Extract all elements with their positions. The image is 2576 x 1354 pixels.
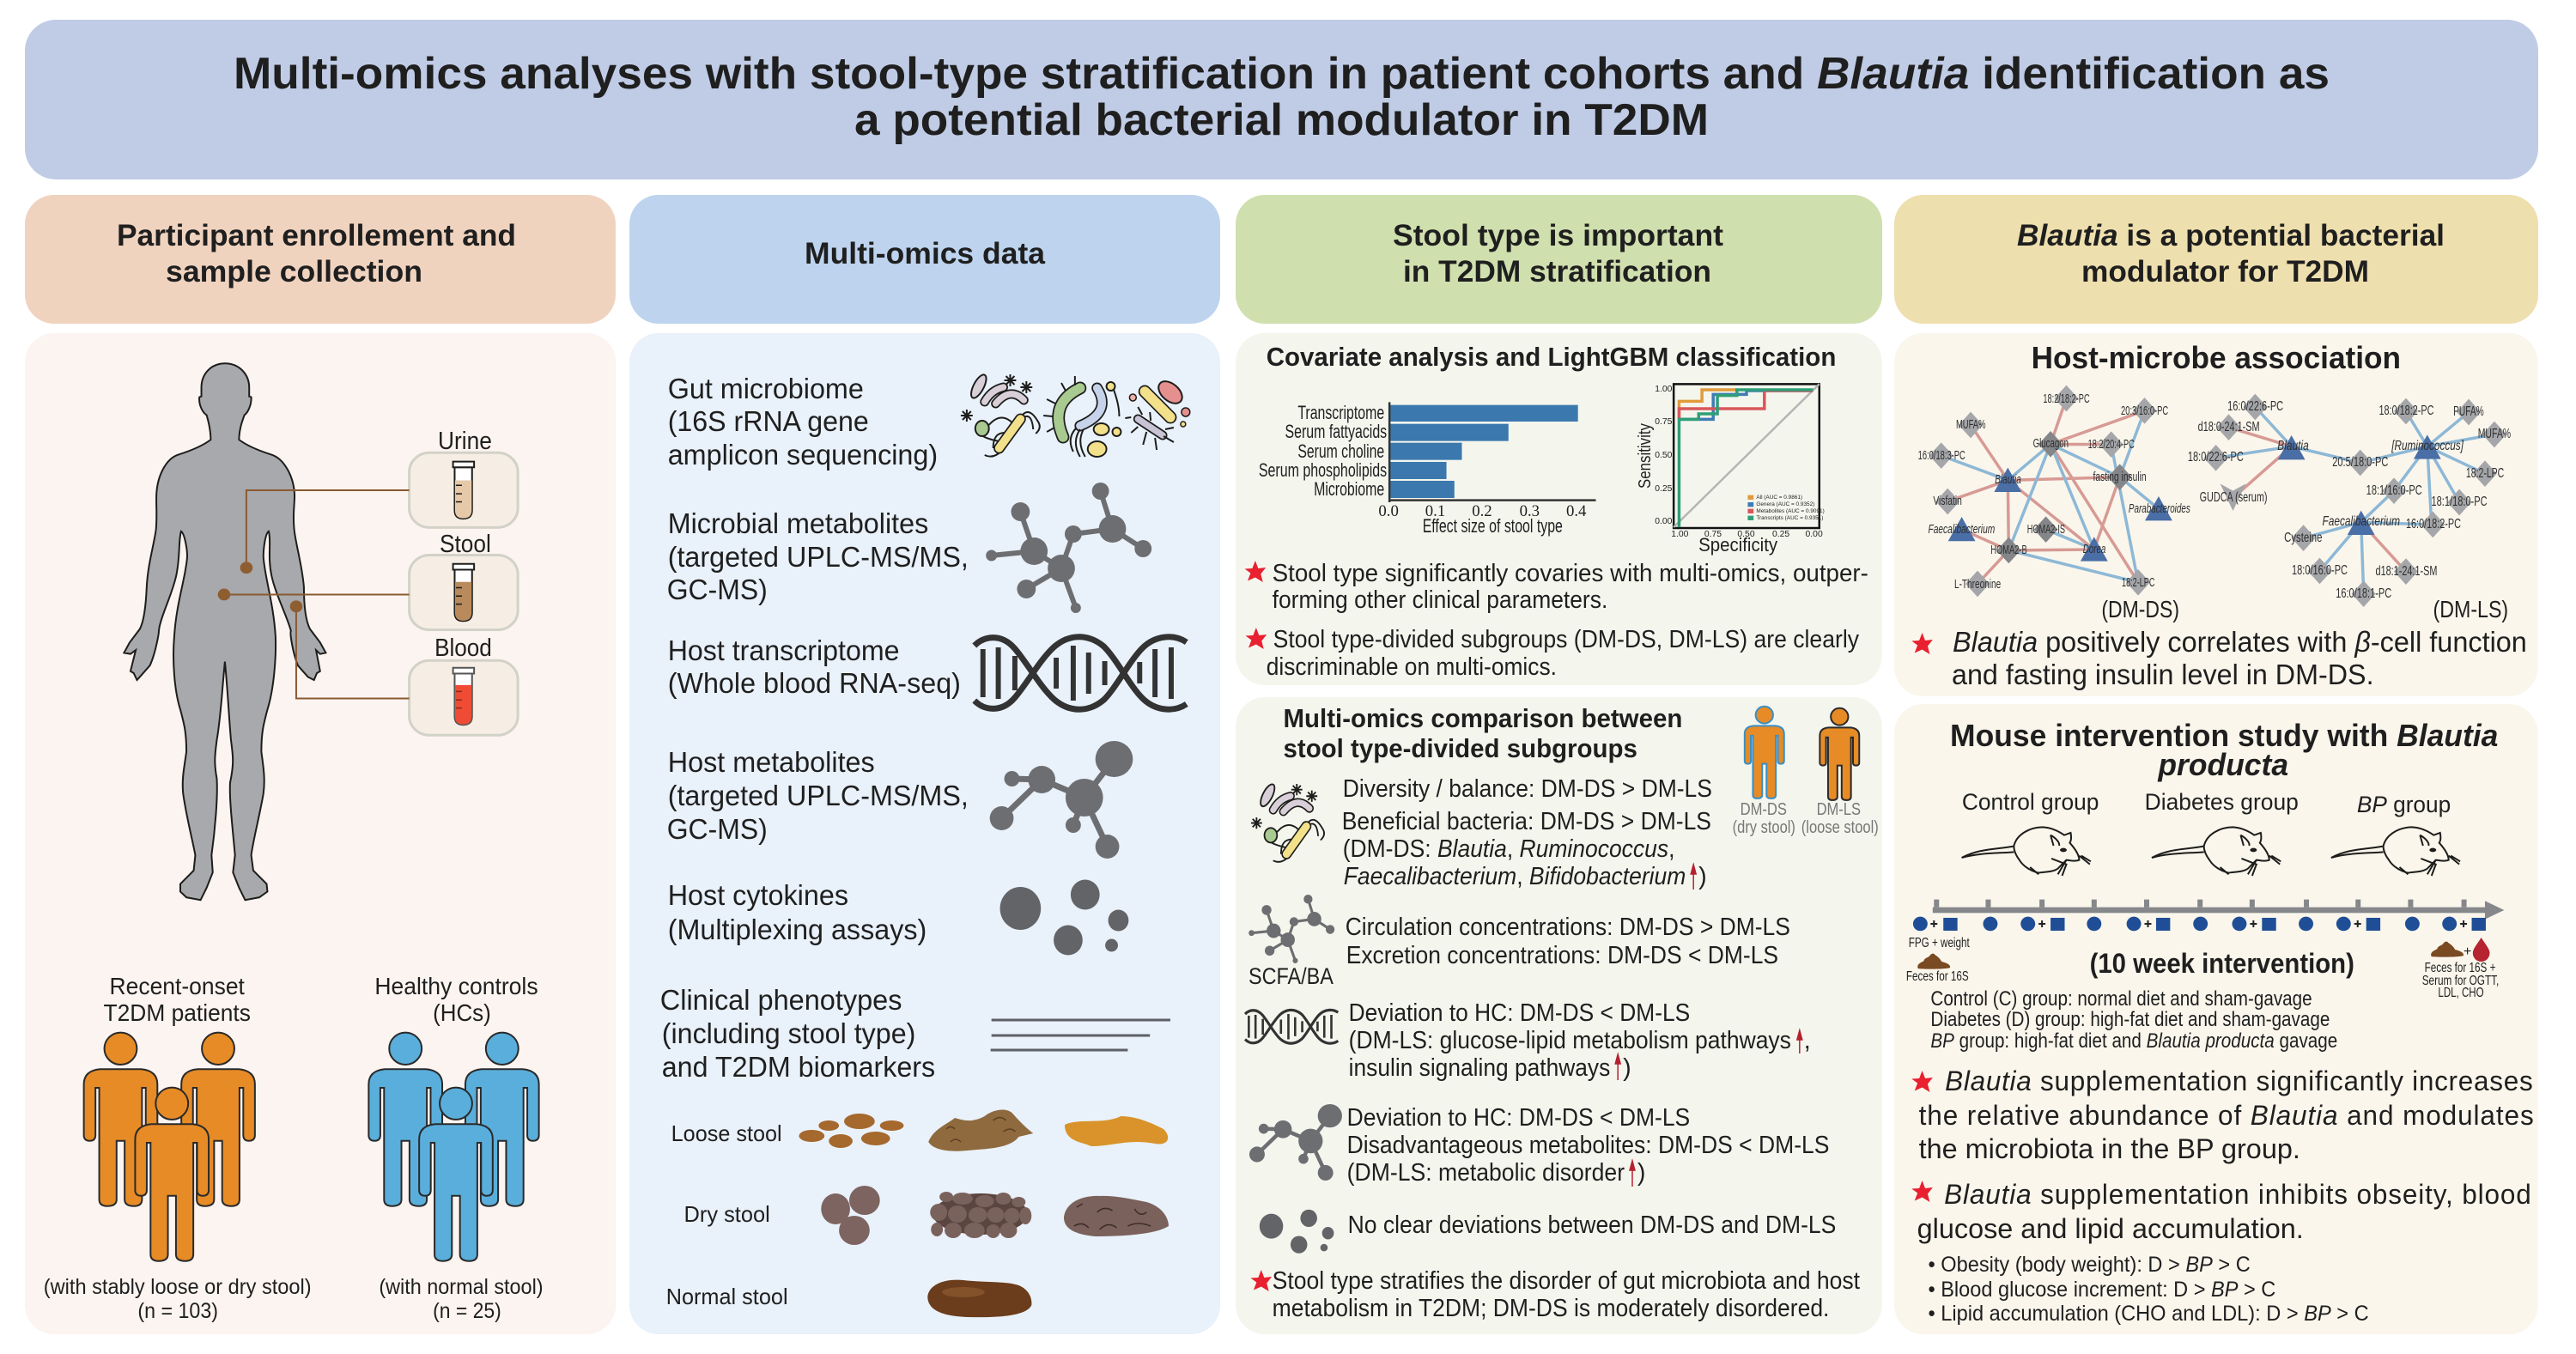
heading: Host-microbe association bbox=[2032, 341, 2401, 375]
network: DM-LS: MUFA% bbox=[2478, 427, 2511, 441]
header: participant enrollment: sample collection bbox=[166, 255, 422, 288]
microbiome comparison text: Beneficial bacteria: DM-DS > DM-LS bbox=[1342, 808, 1711, 835]
bar chart: effect size of stool type: 0.2 bbox=[1472, 502, 1492, 520]
header: participant enrollment bbox=[25, 195, 616, 324]
network: DM-DS: 18:2/20:4-PC bbox=[2088, 438, 2135, 452]
transcriptome comparison text: , bbox=[1804, 1027, 1811, 1054]
bar chart: effect size of stool type: Serum fattyacids bbox=[1285, 421, 1387, 442]
sample labels: Blood bbox=[434, 634, 492, 662]
group descriptions: Control (C) group: normal diet and sham-gavage bbox=[1930, 987, 2312, 1011]
text: gut microbiome: Gut microbiome bbox=[668, 373, 864, 404]
chart: ROC curves: 0.50 bbox=[1737, 530, 1755, 539]
network: DM-LS: 18:0/18:2-PC bbox=[2379, 404, 2433, 418]
text: host metabolites: Host metabolites bbox=[668, 746, 875, 778]
finding 2 bbox=[1911, 1179, 2531, 1244]
metabolite comparison text: ) bbox=[1637, 1159, 1645, 1187]
group label: healthy controls bbox=[374, 973, 538, 1026]
sample tubes and connectors bbox=[218, 452, 518, 735]
finding 2: glucose and lipid accumulation. bbox=[1917, 1213, 2304, 1244]
network: DM-LS: 18:0/22:6-PC bbox=[2188, 450, 2244, 464]
sample labels: Urine bbox=[438, 428, 492, 455]
text: host transcriptome bbox=[668, 634, 961, 699]
panel: multi-omics comparison bbox=[1236, 697, 1882, 1334]
panel: mouse intervention study bbox=[1894, 704, 2538, 1334]
chart: ROC curves: 1.00 bbox=[1655, 385, 1673, 394]
network: DM-DS: Glucagon bbox=[2033, 437, 2069, 451]
icon: metabolite molecule small bbox=[1249, 1104, 1342, 1181]
network: DM-LS: 18:1/16:0-PC bbox=[2366, 483, 2422, 498]
chart: ROC curves: 0.75 bbox=[1704, 530, 1722, 539]
header: multi-omics data: Multi-omics data bbox=[805, 237, 1046, 270]
header: Blautia modulator: Blautia is a potential bacterial bbox=[2017, 219, 2445, 252]
text: host cytokines: Host cytokines bbox=[668, 879, 848, 911]
finding 1 bbox=[1911, 1066, 2534, 1164]
network: DM-LS: [Ruminococcus] bbox=[2391, 439, 2464, 453]
chart: ROC curves: 0.50 bbox=[1655, 451, 1673, 460]
subgroup labels: (loose stool) bbox=[1801, 818, 1879, 837]
bar chart: effect size of stool type: 0.0 bbox=[1378, 502, 1399, 520]
transcriptome comparison text bbox=[1349, 999, 1811, 1082]
microbiome comparison text: (DM-DS: Blautia, Ruminococcus, bbox=[1343, 835, 1674, 863]
subgroup labels: (dry stool) bbox=[1733, 818, 1795, 837]
network: DM-LS: 18:2-LPC bbox=[2466, 466, 2504, 481]
chart: ROC curves: 0.00 bbox=[1806, 530, 1823, 539]
text: microbial metabolites bbox=[667, 507, 969, 605]
group label: T2DM patients bbox=[104, 973, 251, 1026]
heading: Mouse intervention study with Blautia bbox=[1950, 719, 2498, 753]
heading bbox=[1284, 703, 1682, 763]
text: microbial metabolites: Microbial metabolites bbox=[668, 507, 928, 539]
network: DM-LS: PUFA% bbox=[2453, 404, 2484, 419]
text: host metabolites bbox=[667, 746, 969, 845]
group labels: BP group bbox=[2357, 792, 2451, 817]
header: stool type: Stool type is important bbox=[1393, 219, 1723, 252]
text: gut microbiome: (16S rRNA gene bbox=[668, 405, 869, 437]
transcriptome comparison text: ) bbox=[1623, 1054, 1631, 1082]
endpoint sampling: + bbox=[2464, 944, 2471, 959]
header: stool type: in T2DM stratification bbox=[1403, 255, 1711, 288]
chart: ROC curves: 0.25 bbox=[1655, 484, 1673, 494]
text: microbial metabolites: (targeted UPLC-MS/MS, bbox=[668, 541, 969, 573]
network: DM-DS: Dorea bbox=[2083, 543, 2105, 556]
bar chart: effect size of stool type: Transcriptome bbox=[1297, 402, 1384, 423]
text: microbial metabolites: GC-MS) bbox=[667, 574, 768, 605]
text: host metabolites: GC-MS) bbox=[667, 813, 768, 845]
finding 1: the relative abundance of Blautia and modulates bbox=[1919, 1100, 2534, 1131]
conclusion: metabolism in T2DM; DM-DS is moderately disordered. bbox=[1273, 1295, 1829, 1322]
text: host transcriptome: (Whole blood RNA-seq) bbox=[668, 667, 961, 699]
group descriptions: Diabetes (D) group: high-fat diet and sham-gavage bbox=[1930, 1008, 2330, 1031]
network: DM-DS: MUFA% bbox=[1956, 418, 1985, 432]
stool row labels: Dry stool bbox=[684, 1203, 770, 1227]
network: DM-LS bbox=[2188, 394, 2511, 622]
microbiome comparison text: Diversity / balance: DM-DS > DM-LS bbox=[1343, 775, 1712, 803]
header: participant enrollment: Participant enrollement and bbox=[117, 219, 516, 252]
stool row labels: Loose stool bbox=[671, 1122, 782, 1146]
title banner bbox=[25, 20, 2538, 179]
network: DM-LS: (DM-LS) bbox=[2433, 596, 2508, 622]
network: DM-LS: 16:0/22:6-PC bbox=[2227, 399, 2283, 414]
bullet list bbox=[1928, 1254, 2369, 1326]
group descriptions: BP group: high-fat diet and Blautia producta gavage bbox=[1930, 1029, 2337, 1053]
network: DM-DS: 18:2/18:2-PC bbox=[2043, 392, 2090, 406]
subgroup labels: DM-DS bbox=[1741, 800, 1787, 819]
network: DM-DS: fasting insulin bbox=[2093, 471, 2147, 484]
healthy cohort caption bbox=[379, 1275, 544, 1323]
metabolite comparison text: Deviation to HC: DM-DS < DM-LS bbox=[1347, 1104, 1690, 1132]
healthy cohort caption: (with normal stool) bbox=[379, 1275, 544, 1299]
title banner: a potential bacterial modulator in T2DM bbox=[854, 95, 1709, 145]
title banner: Multi-omics analyses with stool-type stratification in patient cohorts and Blautia identification as bbox=[234, 49, 2330, 99]
network: DM-DS: (DM-DS) bbox=[2101, 596, 2179, 622]
icon: DM-DS person bbox=[1745, 707, 1784, 798]
bullet list: • Lipid accumulation (CHO and LDL): D > BP > C bbox=[1928, 1302, 2369, 1326]
group labels: Diabetes group bbox=[2145, 789, 2299, 815]
chart: ROC curves bbox=[1635, 384, 1825, 556]
icon: normal stool bbox=[927, 1280, 1031, 1317]
network: DM-LS: 16:0/18:2-PC bbox=[2406, 517, 2461, 531]
text: clinical phenotypes: (including stool type) bbox=[662, 1017, 915, 1049]
network: DM-LS: d18:1-24:1-SM bbox=[2376, 564, 2437, 579]
group labels bbox=[1962, 789, 2451, 817]
bar chart: effect size of stool type: 0.4 bbox=[1566, 502, 1587, 520]
finding: and fasting insulin level in DM-DS. bbox=[1952, 659, 2374, 690]
chart: ROC curves: 0.00 bbox=[1655, 517, 1673, 526]
sample labels bbox=[434, 428, 492, 662]
icon: microbial molecule bbox=[986, 483, 1151, 613]
transcriptome comparison text: insulin signaling pathways bbox=[1349, 1054, 1610, 1082]
chart: ROC curves: 0.25 bbox=[1772, 530, 1789, 539]
T2DM cohort caption bbox=[44, 1275, 312, 1323]
panel: multi-omics data bbox=[629, 333, 1220, 1334]
header: Blautia modulator: modulator for T2DM bbox=[2081, 255, 2369, 288]
SCFA comparison text: Excretion concentrations: DM-DS < DM-LS bbox=[1346, 942, 1778, 969]
healthy cohort caption: (n = 25) bbox=[433, 1299, 501, 1323]
metabolite comparison text: (DM-LS: metabolic disorder bbox=[1347, 1159, 1625, 1187]
network: DM-LS: Blautia bbox=[2277, 439, 2309, 453]
text: host metabolites: (targeted UPLC-MS/MS, bbox=[668, 780, 969, 811]
icon: healthy control group bbox=[368, 1033, 539, 1261]
stool row labels bbox=[666, 1122, 788, 1309]
icon: DM-LS person bbox=[1820, 708, 1859, 800]
network: DM-DS: Blautia bbox=[1995, 473, 2021, 487]
finding 2: discriminable on multi-omics. bbox=[1267, 653, 1557, 681]
endpoint sampling: Feces for 16S + bbox=[2425, 961, 2495, 975]
endpoint sampling: Serum for OGTT, bbox=[2422, 974, 2499, 988]
network: DM-DS: Parabacteroides bbox=[2129, 502, 2190, 516]
network: DM-DS: 16:0/18:3-PC bbox=[1918, 449, 1965, 463]
chart: ROC curves: Sensitivity bbox=[1635, 423, 1655, 489]
icon: cytokine dots bbox=[1000, 879, 1128, 955]
group label: T2DM patients: T2DM patients bbox=[104, 999, 251, 1026]
network: DM-DS: Visfatin bbox=[1933, 495, 1962, 508]
network: DM-DS: 18:2-LPC bbox=[2122, 576, 2155, 590]
conclusion: Stool type stratifies the disorder of gut microbiota and host bbox=[1273, 1267, 1860, 1295]
heading: Covariate analysis and LightGBM classification bbox=[1267, 342, 1836, 372]
baseline sampling: FPG + weight bbox=[1909, 936, 1970, 950]
cytokine comparison text: No clear deviations between DM-DS and DM-LS bbox=[1348, 1211, 1836, 1239]
baseline sampling: Feces for 16S bbox=[1906, 969, 1969, 984]
text: clinical phenotypes: and T2DM biomarkers bbox=[662, 1051, 935, 1083]
finding 1 bbox=[1245, 560, 1868, 614]
text: host cytokines bbox=[668, 879, 927, 945]
chart: ROC curves: Genera (AUC = 0.9352) bbox=[1756, 501, 1814, 507]
baseline sampling bbox=[1906, 936, 1970, 984]
microbiome comparison text bbox=[1342, 775, 1712, 890]
icon: DNA helix bbox=[975, 637, 1187, 709]
panel: host-microbe association bbox=[1894, 333, 2538, 696]
header: Blautia modulator bbox=[1894, 195, 2538, 324]
panel: participant enrollment and sample collection bbox=[25, 333, 616, 1334]
finding 2 bbox=[1245, 626, 1860, 681]
text: host cytokines: (Multiplexing assays) bbox=[668, 914, 927, 945]
microbiome comparison text: Faecalibacterium, Bifidobacterium bbox=[1344, 863, 1686, 890]
bar chart: effect size of stool type: Effect size of stool type bbox=[1423, 515, 1563, 537]
network: DM-LS: 16:0/18:1-PC bbox=[2336, 586, 2391, 601]
chart: ROC curves: 0.75 bbox=[1655, 417, 1673, 427]
icon: cytokine small bbox=[1260, 1210, 1334, 1254]
bar chart: effect size of stool type: Serum choline bbox=[1297, 440, 1384, 462]
icon: human body silhouette bbox=[124, 363, 325, 900]
text: clinical phenotypes: Clinical phenotypes bbox=[660, 984, 902, 1016]
bar chart: effect size of stool type: Serum phospholipids bbox=[1259, 459, 1387, 481]
endpoint sampling: LDL, CHO bbox=[2438, 986, 2484, 1000]
bar chart: effect size of stool type: Microbiome bbox=[1314, 478, 1384, 500]
chart: ROC curves: Specificity bbox=[1698, 534, 1777, 556]
chart: ROC curves: Metabolites (AUC = 0.9091) bbox=[1756, 508, 1825, 514]
timeline bbox=[1913, 900, 2504, 931]
bar chart: effect size of stool type: 0.3 bbox=[1520, 502, 1540, 520]
chart: ROC curves: 1.00 bbox=[1671, 530, 1689, 539]
network: DM-LS: Faecalibacterium bbox=[2322, 514, 2400, 529]
network: DM-LS: 20:5/18:0-PC bbox=[2332, 455, 2388, 470]
bullet list: • Obesity (body weight): D > BP > C bbox=[1928, 1254, 2251, 1277]
icon: DNA small bbox=[1245, 1010, 1338, 1043]
icon: T2DM patient group bbox=[84, 1033, 255, 1261]
network: DM-LS: Cysteine bbox=[2284, 531, 2323, 545]
T2DM cohort caption: (with stably loose or dry stool) bbox=[44, 1275, 312, 1299]
network: DM-LS: GUDCA (serum) bbox=[2200, 490, 2267, 505]
heading: stool type-divided subgroups bbox=[1284, 733, 1637, 763]
group labels: Control group bbox=[1962, 789, 2099, 815]
finding 1: the microbiota in the BP group. bbox=[1919, 1133, 2300, 1164]
text: gut microbiome: amplicon sequencing) bbox=[668, 439, 938, 471]
finding 1: forming other clinical parameters. bbox=[1273, 586, 1607, 614]
stool row labels: Normal stool bbox=[666, 1285, 788, 1309]
finding 2: Blautia supplementation inhibits obseity, blood bbox=[1944, 1179, 2531, 1210]
network: DM-DS bbox=[1918, 386, 2190, 622]
network: DM-DS: L-Threonine bbox=[1954, 578, 2001, 592]
icon: microbe small bbox=[1251, 782, 1324, 862]
icon: SCFA/BA molecule: SCFA/BA bbox=[1249, 963, 1334, 989]
network: DM-LS: d18:0-24:1-SM bbox=[2198, 420, 2260, 434]
group label: healthy controls: Healthy controls bbox=[374, 973, 538, 999]
finding 1: Blautia supplementation significantly increases bbox=[1945, 1066, 2533, 1096]
subgroup labels bbox=[1733, 800, 1879, 837]
conclusion bbox=[1250, 1267, 1860, 1322]
bullet list: • Blood glucose increment: D > BP > C bbox=[1928, 1278, 2275, 1302]
heading bbox=[1950, 719, 2498, 782]
group label: healthy controls: (HCs) bbox=[433, 999, 491, 1026]
metabolite comparison text bbox=[1347, 1104, 1829, 1187]
network: DM-DS: HOMA2-B bbox=[1990, 543, 2027, 557]
SCFA comparison text: Circulation concentrations: DM-DS > DM-LS bbox=[1346, 914, 1790, 941]
heading: producta bbox=[2157, 748, 2288, 782]
group descriptions bbox=[1930, 987, 2337, 1053]
finding: Blautia positively correlates with β-cell function bbox=[1953, 626, 2527, 658]
finding 2: Stool type-divided subgroups (DM-DS, DM-LS) are clearly bbox=[1273, 626, 1860, 653]
icon: host molecule bbox=[990, 741, 1133, 859]
group label: T2DM patients: Recent-onset bbox=[110, 973, 245, 999]
T2DM cohort caption: (n = 103) bbox=[137, 1299, 218, 1323]
transcriptome comparison text: (DM-LS: glucose-lipid metabolism pathways bbox=[1349, 1027, 1791, 1054]
network: DM-DS: HOMA2-IS bbox=[2027, 523, 2065, 537]
icon: text lines bbox=[991, 1020, 1170, 1050]
subgroup labels: DM-LS bbox=[1817, 800, 1861, 819]
metabolite comparison text: Disadvantageous metabolites: DM-DS < DM-LS bbox=[1347, 1132, 1829, 1159]
header: stool type bbox=[1236, 195, 1882, 324]
icon: loose stool examples bbox=[799, 1110, 1168, 1151]
text: clinical phenotypes bbox=[660, 984, 935, 1083]
sample labels: Stool bbox=[440, 531, 491, 558]
endpoint sampling bbox=[2422, 938, 2499, 1000]
finding bbox=[1911, 626, 2527, 690]
icon: mice bbox=[1962, 827, 2460, 876]
SCFA comparison text bbox=[1346, 914, 1790, 969]
network: DM-LS: 18:1/18:0-PC bbox=[2432, 495, 2488, 509]
text: gut microbiome bbox=[668, 373, 938, 471]
network: DM-LS: 18:0/16:0-PC bbox=[2292, 563, 2348, 578]
header: multi-omics data bbox=[629, 195, 1220, 324]
intervention duration: (10 week intervention) bbox=[2090, 948, 2354, 979]
heading: Multi-omics comparison between bbox=[1284, 703, 1682, 733]
bar chart: effect size of stool type bbox=[1259, 402, 1596, 537]
transcriptome comparison text: Deviation to HC: DM-DS < DM-LS bbox=[1349, 999, 1690, 1027]
chart: ROC curves: Transcripts (AUC = 0.9351) bbox=[1756, 515, 1823, 521]
network: DM-DS: Faecalibacterium bbox=[1928, 523, 1995, 537]
text: host transcriptome: Host transcriptome bbox=[668, 634, 900, 666]
icon: gut bacteria bbox=[961, 373, 1190, 457]
icon: SCFA/BA molecule bbox=[1249, 895, 1334, 989]
icon: dry stool examples bbox=[821, 1186, 1169, 1245]
bar chart: effect size of stool type: 0.1 bbox=[1425, 502, 1445, 520]
network: DM-DS: 20:3/16:0-PC bbox=[2121, 404, 2168, 418]
microbiome comparison text: ) bbox=[1698, 863, 1707, 890]
chart: ROC curves: All (AUC = 0.9861) bbox=[1756, 495, 1802, 501]
panel: covariate analysis bbox=[1236, 333, 1882, 685]
finding 1: Stool type significantly covaries with multi-omics, outper- bbox=[1273, 560, 1868, 587]
